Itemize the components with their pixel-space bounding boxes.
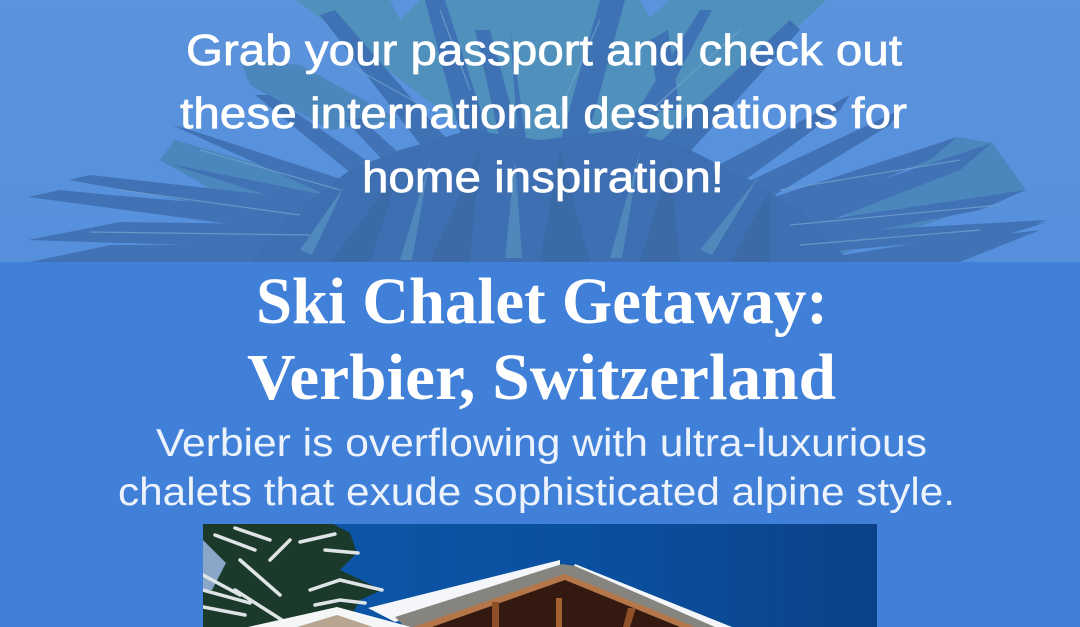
dark crown of overlapping leaves bbox=[318, 130, 843, 262]
illustration: palm fronds bbox=[28, 0, 1047, 262]
text block: destination description: Verbier is overflowing with ultra-luxurious bbox=[156, 422, 927, 465]
heading: destination title: Verbier, Switzerland bbox=[247, 341, 836, 414]
panel: chalet section background bbox=[0, 262, 1080, 627]
lower gable bbox=[248, 607, 411, 627]
photo: snowy chalet against blue sky bbox=[203, 524, 877, 627]
panel: palm tree header band bbox=[0, 0, 1080, 262]
heading: destination title: Ski Chalet Getaway: bbox=[256, 265, 828, 338]
heading: intro text: home inspiration! bbox=[362, 153, 724, 202]
frond ribs and highlights bbox=[90, 10, 1000, 245]
right fan bbox=[700, 95, 1047, 262]
text block: destination description: chalets that exude sophisticated alpine style. bbox=[118, 471, 955, 514]
heading: intro text: these international destinations for bbox=[180, 89, 907, 138]
heading: destination title bbox=[247, 265, 836, 414]
chalet roof bbox=[368, 560, 732, 627]
heading: intro text bbox=[180, 26, 907, 202]
text block: destination description bbox=[118, 422, 955, 514]
upper fan, teal leaves bbox=[296, 0, 826, 140]
heading: intro text: Grab your passport and check out bbox=[186, 26, 902, 75]
left fan bbox=[160, 60, 1026, 262]
fir tree bbox=[203, 524, 382, 627]
